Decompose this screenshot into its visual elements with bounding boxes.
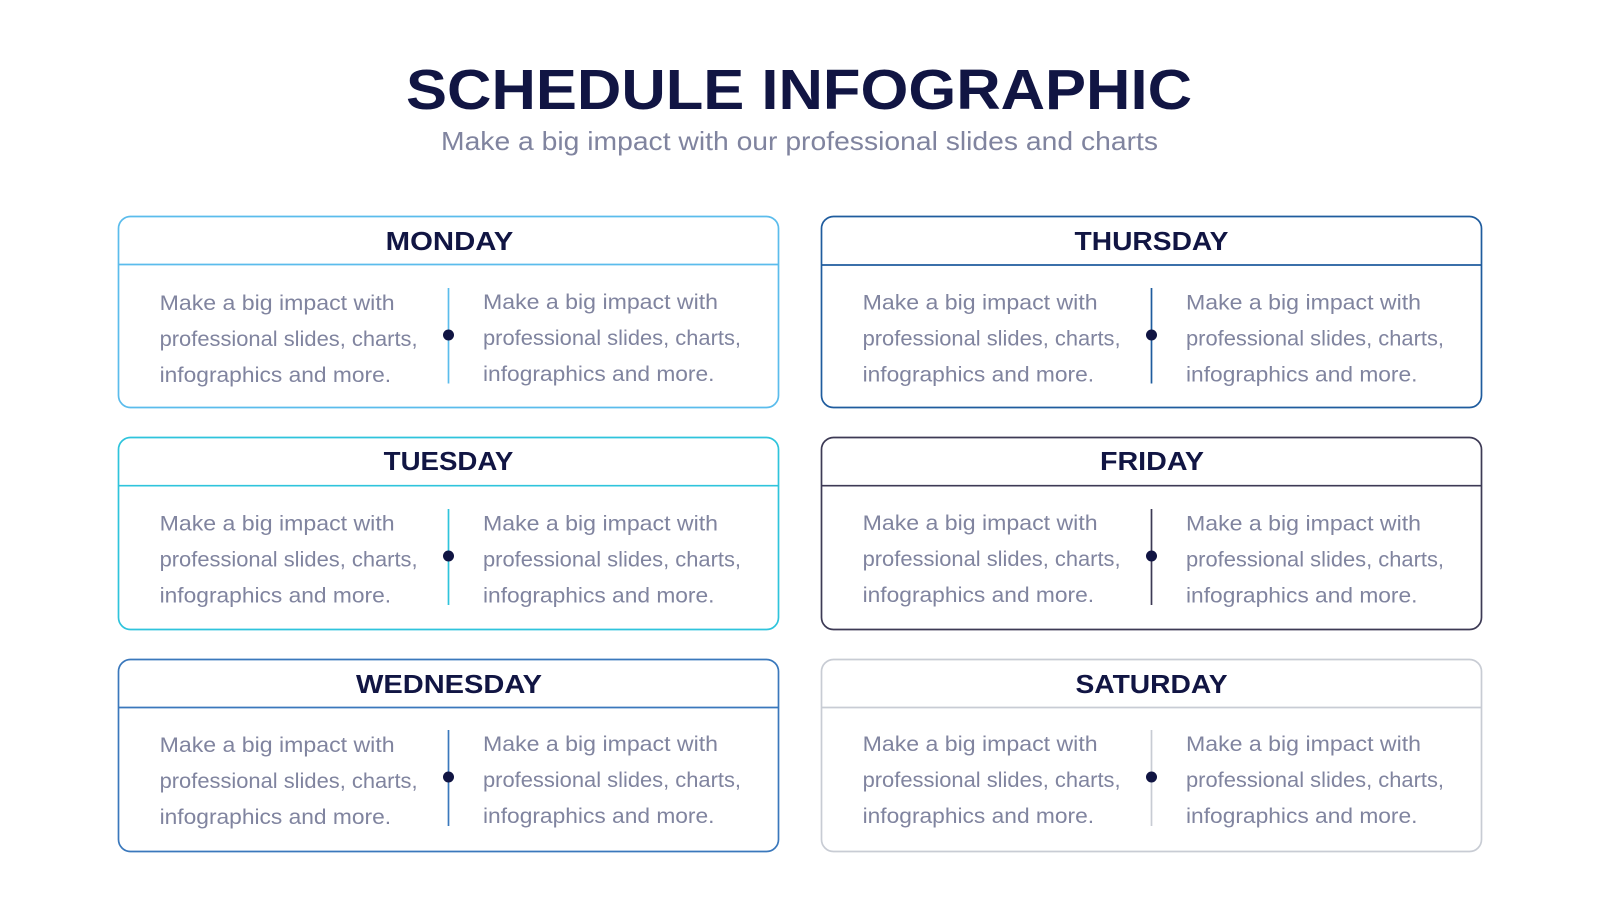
text block: tuesday left: infographics and more. [160, 584, 391, 608]
heading: wednesday: WEDNESDAY [356, 671, 542, 699]
text block: saturday left: Make a big impact with [863, 733, 1098, 756]
text block: thursday right: infographics and more. [1186, 364, 1418, 386]
heading: saturday: SATURDAY [1076, 671, 1228, 699]
panel: thursday [822, 216, 1482, 408]
text block: monday right [483, 291, 741, 386]
subtitle: Make a big impact with our professional slides and charts [441, 126, 1158, 156]
text block: friday right: professional slides, charts, [1186, 548, 1444, 572]
text block: friday left: infographics and more. [863, 584, 1094, 607]
text block: tuesday right [483, 512, 741, 608]
panel: friday [822, 438, 1482, 630]
panel: tuesday [118, 438, 778, 630]
text block: friday right: infographics and more. [1186, 584, 1418, 608]
heading: monday: MONDAY [386, 228, 513, 256]
text block: monday right: infographics and more. [483, 363, 714, 386]
text block: thursday left: professional slides, charts, [863, 328, 1121, 350]
heading: thursday: THURSDAY [1074, 228, 1228, 256]
text block: friday right: Make a big impact with [1186, 512, 1421, 536]
text block: tuesday right: infographics and more. [483, 584, 714, 608]
text block: saturday right: infographics and more. [1186, 805, 1418, 828]
panel: wednesday [118, 660, 778, 852]
text block: saturday left [863, 733, 1121, 828]
heading: friday: FRIDAY [1100, 448, 1204, 476]
text block: monday left: Make a big impact with [160, 292, 395, 315]
text block: saturday right: Make a big impact with [1186, 733, 1421, 756]
panel: monday [118, 216, 778, 408]
divider with dot: monday [443, 288, 454, 384]
text block: wednesday left: Make a big impact with [160, 734, 395, 757]
text block: wednesday right [483, 733, 741, 828]
text block: monday left: professional slides, charts, [160, 328, 418, 351]
text block: tuesday left [160, 512, 418, 608]
text block: wednesday left: infographics and more. [160, 806, 391, 829]
text block: saturday left: professional slides, charts, [863, 769, 1121, 792]
text block: tuesday left: Make a big impact with [160, 512, 395, 536]
text block: friday left: professional slides, charts, [863, 548, 1121, 571]
divider with dot: wednesday [443, 730, 454, 826]
text block: friday right [1186, 512, 1444, 608]
text block: wednesday left [160, 734, 418, 829]
text block: thursday right [1186, 292, 1444, 386]
text block: monday right: professional slides, charts, [483, 327, 741, 350]
text block: tuesday right: professional slides, charts, [483, 548, 741, 572]
text block: thursday left [863, 292, 1121, 386]
text block: saturday right: professional slides, charts, [1186, 769, 1444, 792]
text block: tuesday right: Make a big impact with [483, 512, 718, 536]
text block: thursday left: infographics and more. [863, 364, 1094, 386]
divider with dot: friday [1146, 509, 1157, 605]
text block: friday left: Make a big impact with [863, 512, 1098, 535]
text block: wednesday right: professional slides, charts, [483, 769, 741, 792]
text block: thursday left: Make a big impact with [863, 292, 1098, 314]
text block: thursday right: Make a big impact with [1186, 292, 1421, 314]
text block: saturday left: infographics and more. [863, 805, 1094, 828]
text block: wednesday right: infographics and more. [483, 805, 714, 828]
text block: monday left: infographics and more. [160, 364, 391, 387]
divider with dot: tuesday [443, 509, 454, 605]
heading: tuesday: TUESDAY [384, 448, 513, 476]
divider with dot: saturday [1146, 730, 1157, 826]
text block: saturday right [1186, 733, 1444, 828]
text block: friday left [863, 512, 1121, 607]
text block: wednesday left: professional slides, charts, [160, 770, 418, 793]
panel: saturday [822, 660, 1482, 852]
title: SCHEDULE INFOGRAPHIC [406, 58, 1192, 122]
text block: monday right: Make a big impact with [483, 291, 718, 314]
text block: tuesday left: professional slides, charts, [160, 548, 418, 572]
text block: wednesday right: Make a big impact with [483, 733, 718, 756]
divider with dot: thursday [1146, 288, 1157, 384]
text block: thursday right: professional slides, charts, [1186, 328, 1444, 350]
text block: monday left [160, 292, 418, 387]
